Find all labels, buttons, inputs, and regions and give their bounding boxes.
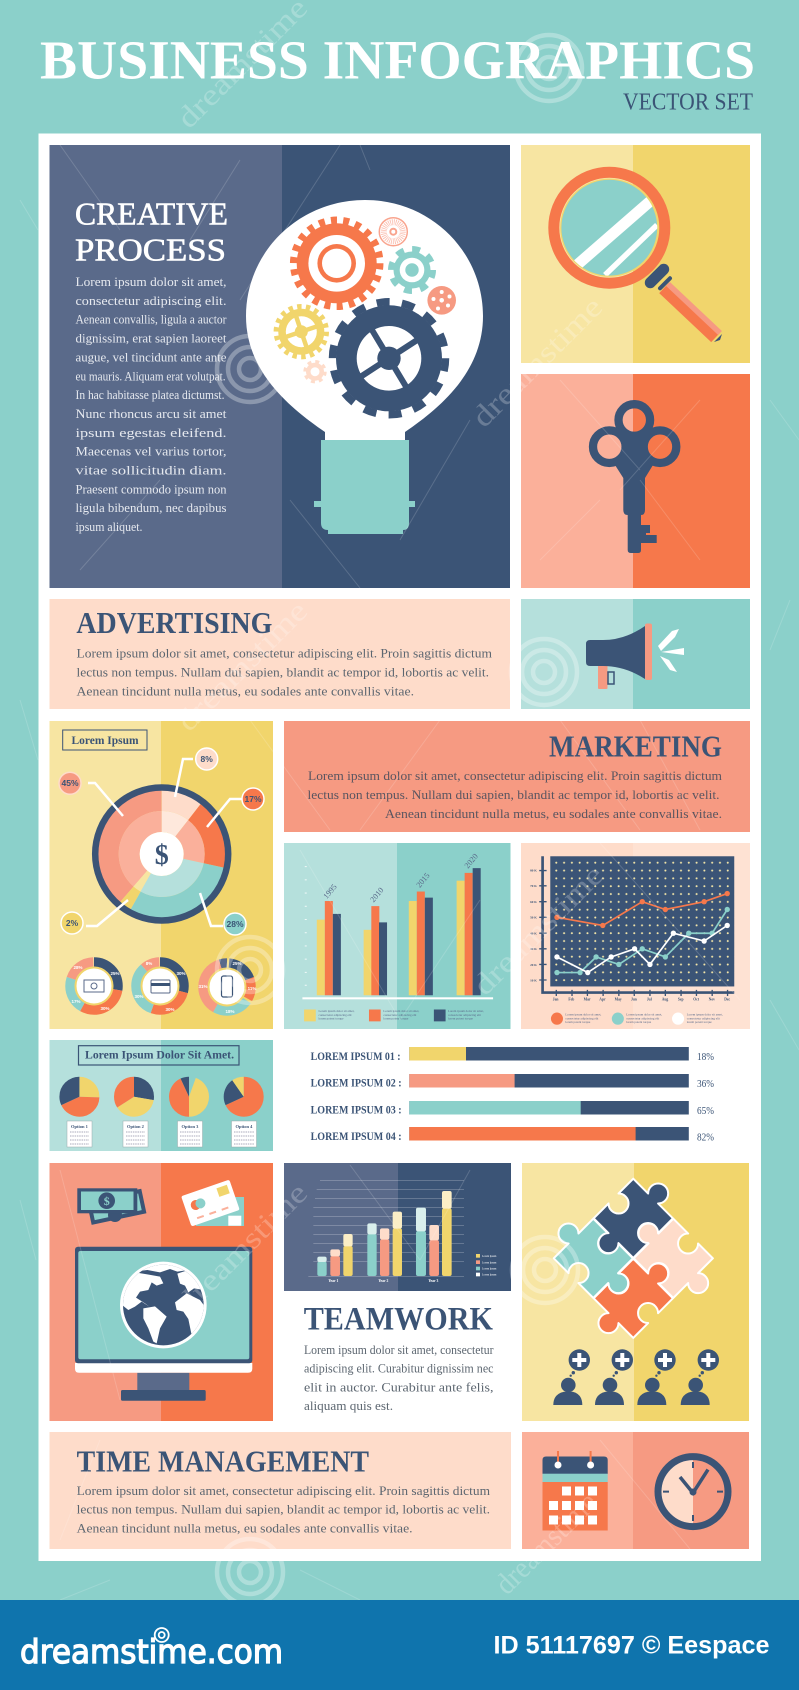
chart: horizontal progress bars: LOREM IPSUM 03 : (311, 1105, 402, 1117)
body text: creative process: Maecenas vel varius tortor, (76, 444, 226, 459)
option cards: Option 4 (236, 1124, 253, 1129)
icon: monitor with globe (75, 1247, 252, 1401)
panel: magnifying glass (521, 145, 750, 363)
chart: lines over dot grid: May (615, 998, 622, 1002)
donut: money: 30% (100, 1006, 110, 1011)
panel: calendar and clock (522, 1432, 749, 1549)
icon: navy gear (332, 302, 446, 415)
chart: horizontal progress bars: LOREM IPSUM 02 : (311, 1078, 402, 1090)
chart: cylinder columns (308, 1181, 497, 1283)
body text: marketing: lectus non tempus. Nullam dui sapien, blandit ac tempor id, lobortis ac velit. (308, 787, 720, 802)
donut: credit card (134, 961, 186, 1012)
body text: teamwork: Lorem ipsum dolor sit amet, consectetur (304, 1342, 494, 1357)
icon: small peach gear (305, 362, 325, 382)
chart: horizontal progress bars: 65% (697, 1105, 714, 1117)
chart: cylinder columns: Lorem Ipsum (482, 1255, 497, 1258)
chart: grouped bars: lorem potent torque (318, 1017, 344, 1021)
body text: time management: lectus non tempus. Nullam dui sapien, blandit ac tempor id, lobortis ac velit. (77, 1502, 490, 1517)
icon: yellow gear (276, 307, 326, 357)
chart: lines over dot grid: Aug (662, 998, 668, 1002)
chart: lines over dot grid: lorem potent torque (626, 1020, 652, 1024)
body text: creative process: ipsum aliquet. (76, 519, 142, 534)
footer logo text: dreamstime.com (20, 1632, 283, 1671)
body text: teamwork: elit in auctor. Curabitur ante felis, (304, 1379, 494, 1394)
chart: lines over dot grid: Jul (647, 998, 652, 1002)
option cards: Option 2 (127, 1124, 145, 1129)
body text: creative process: Aenean convallis, ligula a auctor (76, 312, 227, 327)
panel: dark column chart (284, 1163, 511, 1291)
chart: lines over dot grid: lorem potent torque (565, 1020, 591, 1024)
donut: money: 25% (110, 971, 120, 976)
body text: teamwork: adipiscing elit. Curabitur dignissim nec (304, 1360, 494, 1376)
chart: cylinder columns: Lorem Ipsum (482, 1261, 497, 1264)
label box: pies heading (78, 1046, 239, 1065)
footer bar (0, 1600, 799, 1690)
body text: advertising: Aenean tincidunt nulla metus, eu sodales ante convallis vitae. (76, 684, 414, 698)
icon: megaphone (586, 624, 684, 689)
footer image id: ID 51117697 © Eespace (494, 1631, 770, 1659)
chart: lines over dot grid: 70 K (530, 884, 537, 888)
donut: credit card: 30% (165, 1007, 175, 1012)
panel: four pies (50, 1040, 273, 1151)
donut: money: 17% (71, 999, 81, 1004)
chart: lines over dot grid: consectetur adipiscing elit (687, 1016, 720, 1020)
chart: grouped bars: 2015 (414, 871, 432, 889)
donut: phone: 31% (198, 984, 208, 989)
chart: lines over dot grid: lorem potent torque (687, 1020, 712, 1024)
body text: teamwork: aliquam quis est. (304, 1398, 393, 1413)
watermark: text: dreamstime (466, 290, 609, 434)
white content sheet (38, 134, 761, 1561)
chart: lines over dot grid: Lorem ipsum dolor sit amet, (626, 1013, 662, 1018)
body text: creative process: Nunc rhoncus arcu sit amet (76, 406, 227, 421)
footer logo spiral (155, 1628, 169, 1642)
chart: grouped bars: consectetur adipiscing elit (448, 1013, 481, 1017)
chart: cylinder columns: Lorem Ipsum (482, 1274, 497, 1277)
chart: grouped bars: Lorem ipsum dolor sit amet, (318, 1009, 355, 1014)
chart: lines over dot grid: Jan (553, 998, 558, 1002)
chart: lines over dot grid: 60 K (530, 900, 537, 904)
body text: teamwork (304, 1342, 494, 1413)
callout: 28% (200, 893, 246, 935)
chart: grouped bars (302, 852, 493, 1021)
panel: time management (50, 1432, 511, 1549)
icon: teal gear (391, 249, 433, 291)
icon: banknotes (77, 1188, 146, 1225)
label box: pies heading: Lorem Ipsum Dolor Sit Amet. (85, 1050, 234, 1062)
donut: credit card: 30% (134, 994, 144, 999)
chart: horizontal progress bars: LOREM IPSUM 01 : (311, 1051, 401, 1063)
heading: creative process: PROCESS (75, 232, 226, 268)
chart: grouped bars: consectetur adipiscing elit (318, 1013, 352, 1017)
chart: grouped bars: Lorem ipsum dolor sit amet, (448, 1009, 484, 1014)
chart: cylinder columns: Year 1 (328, 1279, 338, 1283)
heading: advertising: ADVERTISING (76, 605, 272, 640)
watermark: text: dreamstime (171, 594, 314, 738)
icon: calendar (542, 1451, 608, 1530)
body text: time management (77, 1483, 490, 1536)
callout: 45%: 45% (61, 778, 79, 788)
donut: money: 28% (73, 965, 83, 970)
panel: line chart (521, 843, 750, 1029)
body text: creative process: In hac habitasse platea dictumst. (76, 387, 224, 402)
watermark: text (171, 0, 610, 1601)
chart: lines over dot grid: Sep (678, 998, 684, 1002)
donut: money (70, 962, 120, 1011)
watermark: text: dreamstime (171, 1176, 314, 1320)
callout: 28%: 28% (226, 919, 244, 929)
chart: horizontal progress bars: 18% (697, 1051, 714, 1063)
option cards: Option 1 (71, 1124, 89, 1129)
option cards (67, 1121, 256, 1147)
chart: lines over dot grid: 40 K (530, 932, 537, 936)
body text: creative process: Praesent commodo ipsum non (76, 481, 227, 496)
icon: clock (657, 1456, 728, 1527)
icon: globe (120, 1262, 207, 1348)
chart: cylinder columns: Lorem Ipsum (482, 1268, 497, 1271)
chart: lines over dot grid: Lorem ipsum dolor sit amet, (687, 1013, 723, 1018)
donut: credit card: 8% (146, 961, 152, 966)
callout: 2% (61, 900, 128, 934)
body text: marketing: Lorem ipsum dolor sit amet, consectetur adipiscing elit. Proin sagittis dictum (308, 768, 722, 783)
body text: creative process: ipsum egestas eleifend. (76, 425, 226, 440)
body text: advertising: Lorem ipsum dolor sit amet, consectetur adipiscing elit. Proin sagittis dictum (76, 646, 492, 661)
panel: megaphone (521, 599, 750, 709)
body text: creative process: eu mauris. Aliquam erat volutpat. (76, 368, 226, 383)
icon: puzzle pieces (542, 1167, 725, 1350)
chart: grouped bars: lorem potent torque (383, 1017, 409, 1021)
pie 4 (234, 1087, 254, 1107)
chart: cylinder columns: Year 3 (428, 1279, 438, 1283)
heading: time management: TIME MANAGEMENT (77, 1444, 369, 1479)
chart: lines over dot grid: Lorem ipsum dolor sit amet, (565, 1013, 601, 1018)
callout: 45% (59, 772, 123, 816)
chart: lines over dot grid: Jun (631, 998, 637, 1002)
chart: grouped bars: Lorem ipsum dolor sit amet, (383, 1009, 420, 1014)
callout: 8% (175, 748, 218, 797)
panel: orange computer (50, 1163, 273, 1421)
watermark: spirals (217, 35, 582, 1605)
body text: marketing: Aenean tincidunt nulla metus, eu sodales ante convallis vitae. (385, 806, 722, 821)
chart: grouped bars: lorem potent torque (448, 1017, 473, 1021)
panel: creative process (50, 145, 510, 588)
donut: phone: 11% (248, 986, 256, 991)
icon: orange gear (294, 221, 379, 306)
chart: cylinder columns: Year 2 (378, 1279, 388, 1283)
icon: peach dotted wheel (379, 218, 407, 246)
title: BUSINESS INFOGRAPHICS (40, 30, 755, 92)
body text: time management: Lorem ipsum dolor sit amet, consectetur adipiscing elit. Proin sagittis dictum (77, 1483, 490, 1498)
pie 1 (69, 1087, 89, 1107)
chart: lines over dot grid: 50 K (530, 916, 537, 920)
heading: marketing: MARKETING (549, 728, 722, 764)
watermark: text: dreamstime (467, 858, 610, 1002)
body text: creative process: consectetur adipiscing elit. (76, 293, 226, 308)
icon: dollar sign: $ (155, 840, 169, 871)
panel: marketing (284, 721, 750, 832)
option cards: Option 3 (182, 1124, 199, 1129)
callout: 2%: 2% (66, 918, 79, 928)
panel: puzzle and team (522, 1163, 749, 1421)
body text: advertising: lectus non tempus. Nullam dui sapien, blandit ac tempor id, lobortis ac velit. (76, 664, 489, 680)
watermark: text: dreamstime (489, 1486, 604, 1601)
chart: lines over dot grid: 30 K (530, 947, 537, 951)
chart: grouped bars: 2020 (463, 852, 480, 870)
chart: lines over dot grid (530, 856, 734, 1025)
chart: lines over dot grid: Nov (709, 998, 715, 1002)
pie 2 (124, 1087, 144, 1107)
icon: light bulb with gears (246, 200, 483, 534)
body text: creative process: augue, vel tincidunt ante ante (76, 349, 227, 364)
body text: creative process: vitae sollicitudin diam. (76, 462, 226, 478)
chart: lines over dot grid: consectetur adipiscing elit (626, 1016, 659, 1020)
chart: lines over dot grid: Feb (568, 998, 574, 1002)
donut: phone: 18% (225, 1009, 235, 1014)
label box: lorem ipsum (63, 730, 147, 750)
panel: pie chart infographic (50, 721, 273, 1029)
chart: radial pie (95, 788, 228, 920)
body text: creative process: Lorem ipsum dolor sit amet, (76, 274, 227, 289)
chart: lines over dot grid: Mar (584, 998, 591, 1002)
pie 3 (179, 1087, 199, 1107)
callout: 17%: 17% (244, 794, 262, 804)
chart: grouped bars: consectetur adipiscing elit (383, 1013, 417, 1017)
chart: lines over dot grid: Oct (693, 998, 700, 1002)
panel: bar chart (284, 843, 510, 1029)
chart: lines over dot grid: 10 K (530, 978, 537, 982)
chart: lines over dot grid: 80 K (530, 869, 537, 873)
body text: creative process: dignissim, erat sapien laoreet (76, 331, 227, 346)
chart: grouped bars: 1995 (322, 882, 339, 901)
body text: time management: Aenean tincidunt nulla metus, eu sodales ante convallis vitae. (77, 1521, 413, 1536)
icon: credit cards (181, 1180, 244, 1227)
chart: horizontal progress bars: 82% (697, 1132, 714, 1144)
heading: creative process: CREATIVE (75, 196, 228, 232)
icon: magnifying glass (554, 172, 722, 342)
donut: credit card: 30% (176, 971, 186, 976)
callout: 17% (207, 788, 264, 827)
icon: salmon dotted wheel (427, 286, 456, 315)
chart: horizontal progress bars (311, 1047, 714, 1144)
body text: creative process (76, 274, 227, 534)
subtitle: VECTOR SET (623, 90, 753, 116)
label box: lorem ipsum: Lorem Ipsum (72, 735, 139, 747)
heading: creative process (75, 196, 228, 268)
panel: key (521, 374, 750, 588)
chart: lines over dot grid: Apr (599, 998, 606, 1002)
chart: lines over dot grid: consectetur adipiscing elit (565, 1016, 598, 1020)
icon: key (593, 404, 676, 553)
chart: grouped bars: 2010 (368, 886, 385, 904)
watermark: text: dreamstime (171, 0, 314, 135)
chart: horizontal progress bars: 36% (697, 1078, 714, 1090)
panel: advertising (50, 599, 510, 709)
donut: phone: 25% (232, 961, 242, 966)
body text: creative process: ligula bibendum, nec dapibus (76, 500, 226, 515)
chart: lines over dot grid: 20 K (530, 963, 537, 967)
chart: horizontal progress bars: LOREM IPSUM 04 : (311, 1131, 402, 1143)
body text: marketing (308, 768, 722, 821)
donut: phone (198, 961, 256, 1014)
heading: teamwork: TEAMWORK (304, 1302, 493, 1338)
chart: lines over dot grid: Dec (724, 998, 731, 1002)
icon: banknotes: $ (104, 1194, 110, 1208)
callout: 8%: 8% (201, 754, 213, 764)
body text: advertising (76, 646, 492, 698)
icon: team with ideas (553, 1349, 719, 1405)
